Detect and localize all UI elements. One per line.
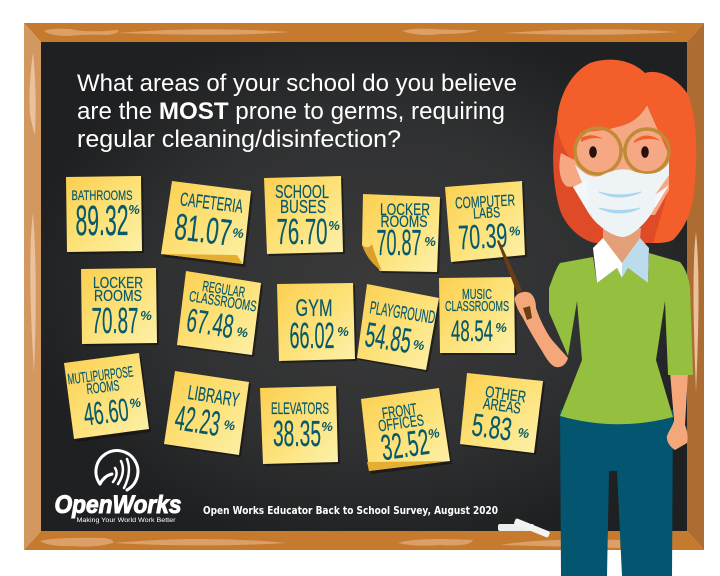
note: other areas bbox=[460, 373, 545, 455]
note: bathrooms: % bbox=[128, 202, 140, 217]
note: school buses: BUSES bbox=[280, 197, 326, 217]
note: locker rooms second row: 70.87 bbox=[92, 300, 138, 341]
note: computer labs: LABS bbox=[473, 204, 501, 223]
note: school buses: % bbox=[328, 218, 340, 233]
blouse collar bbox=[593, 238, 649, 283]
note: locker rooms second row: ROOMS bbox=[94, 288, 142, 305]
note: cafeteria: CAFETERIA bbox=[179, 189, 244, 218]
note: gym: 66.02 bbox=[290, 315, 334, 356]
note: multipurpose rooms bbox=[64, 353, 151, 442]
note: front offices bbox=[361, 388, 452, 474]
face mask bbox=[573, 163, 669, 237]
note: music classrooms: % bbox=[495, 320, 507, 335]
note: multipurpose rooms: % bbox=[128, 395, 142, 411]
note: locker rooms second row bbox=[81, 268, 159, 346]
logo: OpenWorks bbox=[54, 451, 182, 524]
note: playground bbox=[357, 284, 441, 372]
bright hair bbox=[557, 60, 696, 243]
note: regular classrooms bbox=[177, 271, 263, 357]
title: are the MOST prone to germs, requiring bbox=[77, 98, 505, 125]
logo: OpenWorks: OpenWorks bbox=[54, 491, 182, 519]
left arm bbox=[515, 292, 568, 367]
note: front offices: 32.52 bbox=[378, 421, 432, 468]
glasses bbox=[575, 128, 669, 174]
note: elevators: ELEVATORS bbox=[271, 399, 329, 418]
eyebrows bbox=[581, 135, 661, 143]
note: library: LIBRARY bbox=[186, 382, 241, 412]
note: computer labs bbox=[445, 181, 527, 264]
note: cafeteria bbox=[161, 181, 253, 267]
note: multipurpose rooms: MUTLIPURPOSE bbox=[67, 363, 134, 388]
icon: logo circle with waving hand bbox=[96, 451, 138, 490]
note: locker rooms top: 70.87 bbox=[376, 222, 422, 263]
note: multipurpose rooms: 46.60 bbox=[81, 391, 130, 433]
note: cafeteria: 81.07 bbox=[172, 206, 234, 254]
note: locker rooms top: ROOMS bbox=[380, 212, 428, 231]
note: elevators: % bbox=[321, 419, 333, 434]
note: music classrooms: 48.54 bbox=[451, 315, 493, 348]
pants bbox=[560, 410, 673, 576]
logo: OpenWorks: Making Your World Work Better bbox=[76, 517, 176, 524]
note: other areas: AREAS bbox=[482, 396, 522, 418]
note: playground: % bbox=[412, 337, 426, 353]
dark back hair bbox=[553, 120, 672, 243]
title bbox=[77, 70, 517, 153]
note: regular classrooms: % bbox=[235, 324, 250, 341]
note: school buses: 76.70 bbox=[276, 211, 328, 252]
neck bbox=[603, 228, 641, 264]
note: computer labs: % bbox=[508, 223, 521, 239]
ear bbox=[559, 153, 576, 187]
note: computer labs: COMPUTER bbox=[455, 192, 515, 213]
note: library: 42.23 bbox=[172, 398, 223, 444]
note: school buses bbox=[264, 176, 345, 256]
note: gym: GYM bbox=[296, 295, 332, 322]
note: locker rooms second row: LOCKER bbox=[93, 275, 143, 292]
note: front offices: % bbox=[427, 425, 441, 442]
note: locker rooms top: % bbox=[424, 234, 436, 249]
note: bathrooms: BATHROOMS bbox=[72, 187, 132, 203]
note: other areas: 5.83 bbox=[470, 406, 514, 448]
note: gym: % bbox=[337, 324, 349, 339]
note: computer labs: 70.39 bbox=[457, 217, 508, 257]
note: gym bbox=[277, 283, 357, 363]
note: music classrooms: CLASSROOMS bbox=[445, 298, 509, 315]
note: bathrooms: 89.32 bbox=[76, 197, 128, 245]
note: school buses: SCHOOL bbox=[275, 182, 329, 202]
pointer stick bbox=[497, 240, 522, 293]
note: other areas: OTHER bbox=[484, 384, 527, 406]
survey source caption: Open Works Educator Back to School Survey, August 2020 bbox=[203, 505, 498, 517]
note: elevators: 38.35 bbox=[273, 413, 321, 454]
note: locker rooms second row: % bbox=[140, 308, 152, 323]
note: music classrooms bbox=[439, 277, 517, 355]
face bbox=[573, 105, 669, 215]
note: library bbox=[164, 371, 251, 457]
title: What areas of your school do you believe bbox=[77, 70, 517, 97]
note: multipurpose rooms: ROOMS bbox=[86, 377, 120, 398]
icon: chalk pieces bbox=[498, 518, 550, 538]
note: regular classrooms: REGULAR bbox=[201, 278, 246, 302]
note: other areas: % bbox=[517, 425, 531, 441]
note: locker rooms top: LOCKER bbox=[380, 200, 430, 219]
note: library: % bbox=[222, 417, 237, 434]
eyes bbox=[589, 146, 597, 158]
note: music classrooms: MUSIC bbox=[462, 286, 492, 303]
pointer grip bbox=[523, 306, 532, 320]
note: locker rooms top bbox=[362, 194, 442, 274]
title: regular cleaning/disinfection? bbox=[77, 126, 401, 153]
chalkboard bbox=[41, 42, 687, 531]
shirt bbox=[549, 253, 693, 424]
note: playground: 54.85 bbox=[363, 315, 414, 361]
teacher illustration bbox=[497, 60, 696, 576]
note: playground: PLAYGROUND bbox=[368, 297, 437, 328]
note: cafeteria: % bbox=[231, 225, 245, 241]
note: regular classrooms: CLASSROOMS bbox=[188, 288, 258, 316]
note: elevators bbox=[260, 386, 340, 466]
note: bathrooms bbox=[66, 176, 144, 254]
note: regular classrooms: 67.48 bbox=[184, 301, 236, 345]
note: front offices: OFFICES bbox=[377, 412, 425, 435]
right arm bbox=[667, 372, 688, 450]
note: front offices: FRONT bbox=[381, 401, 418, 423]
